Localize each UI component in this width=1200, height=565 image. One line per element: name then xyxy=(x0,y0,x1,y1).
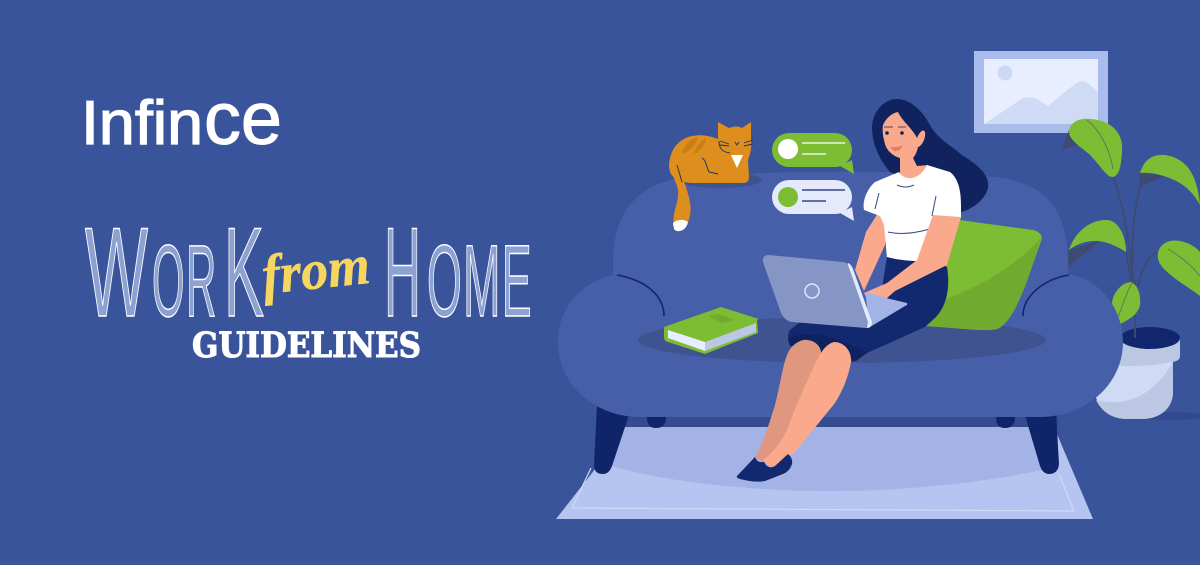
far arm xyxy=(855,210,887,291)
logo: Infince: ce xyxy=(204,77,282,160)
laptop xyxy=(763,255,907,328)
title: Work from Home: K xyxy=(224,201,264,343)
hair xyxy=(872,99,988,213)
sofa xyxy=(558,172,1123,417)
shirt xyxy=(864,165,961,262)
infographic banner: OME xyxy=(427,224,533,338)
picture frame xyxy=(974,51,1108,133)
sofa seat and arms xyxy=(558,273,1123,417)
logo: Infince: Infin xyxy=(81,89,203,158)
potted plant xyxy=(1062,119,1200,420)
title: Work from Home xyxy=(85,201,533,343)
skirt shadow xyxy=(788,334,867,361)
near leg xyxy=(763,342,851,468)
logo: Infince xyxy=(81,77,282,160)
title: Work from Home: W xyxy=(85,201,148,343)
seat shadow xyxy=(638,317,1046,363)
chat bubble: light xyxy=(772,180,854,221)
cat xyxy=(669,122,762,231)
sofa backrest xyxy=(613,172,1068,300)
eyes and mouth xyxy=(884,127,906,151)
right arm crease xyxy=(1023,275,1069,316)
skirt xyxy=(788,257,948,361)
rug xyxy=(556,427,1093,519)
left arm crease xyxy=(617,275,664,316)
far leg xyxy=(755,340,821,462)
near arm xyxy=(864,215,961,307)
title: Work from Home: H xyxy=(384,201,421,343)
shoe xyxy=(737,454,792,482)
sofa back legs and floor shadow xyxy=(618,415,1058,428)
woman xyxy=(737,99,988,482)
subtitle: Guidelines: GUIDELINES xyxy=(192,325,421,366)
shirt creases xyxy=(875,185,936,233)
chat bubble: green xyxy=(772,133,854,174)
book xyxy=(664,307,759,354)
sofa front legs xyxy=(594,405,1059,474)
neck and face xyxy=(883,112,928,180)
title: Work from Home: from xyxy=(259,234,373,307)
title: Work from Home: OR xyxy=(152,224,218,338)
cushion xyxy=(925,218,1042,330)
